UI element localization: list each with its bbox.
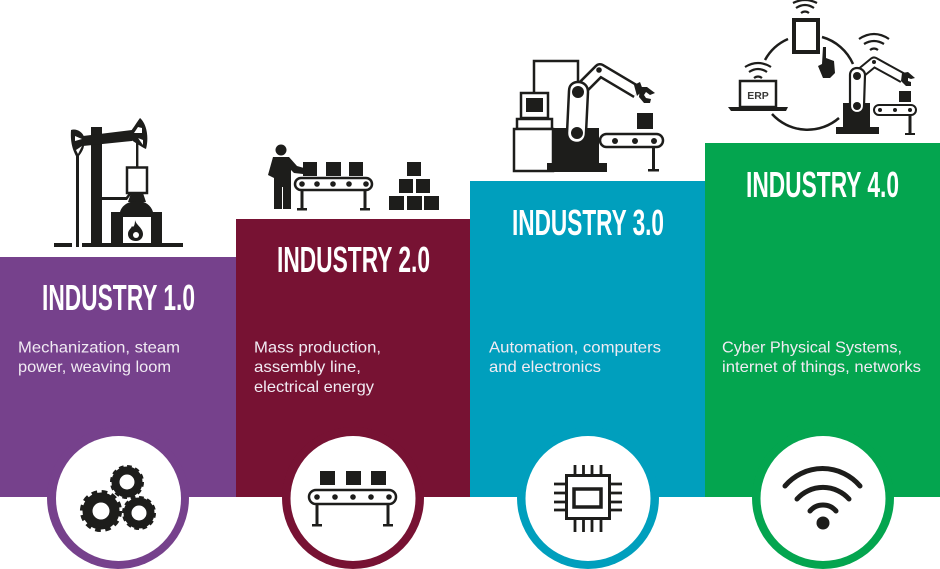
circle badge: gears — [47, 427, 189, 569]
circle badge: wifi — [752, 427, 894, 569]
text: Industry 2.0 description: assembly line, — [254, 359, 361, 376]
icon: worker at assembly line — [268, 144, 439, 210]
icon: gears — [82, 467, 154, 530]
heading: Industry 2.0: INDUSTRY 2.0 — [277, 239, 430, 280]
icon: microchip — [554, 465, 622, 532]
icon: connected factory network — [728, 0, 916, 135]
text: Industry 2.0 description: Mass production, — [254, 340, 381, 356]
text: Industry 4.0 description: internet of things, networks — [722, 359, 921, 376]
circle badge: conveyor — [282, 427, 424, 569]
text: Industry 4.0 description: Cyber Physical Systems, — [722, 340, 902, 356]
panel: Industry 4.0 — [705, 0, 940, 569]
heading: Industry 3.0: INDUSTRY 3.0 — [512, 202, 664, 243]
icon: connected factory network: ERP — [747, 90, 769, 102]
icon: steam engine — [54, 118, 183, 247]
text: Industry 3.0 description — [489, 340, 661, 376]
text: Industry 2.0 description — [254, 340, 381, 396]
icon: conveyor belt — [309, 471, 396, 526]
text: Industry 4.0 description — [722, 340, 921, 376]
panel: Industry 2.0 — [236, 144, 470, 569]
text: Industry 3.0 description: and electronics — [489, 359, 601, 376]
heading: Industry 1.0: INDUSTRY 1.0 — [42, 277, 195, 318]
circle badge: chip — [517, 427, 659, 569]
text: Industry 2.0 description: electrical energy — [254, 379, 374, 396]
icon: wifi signal — [785, 469, 860, 530]
text: Industry 1.0 description — [18, 340, 180, 376]
text: Industry 3.0 description: Automation, computers — [489, 340, 661, 356]
text: Industry 1.0 description: power, weaving loom — [18, 359, 171, 376]
text: Industry 1.0 description: Mechanization, steam — [18, 340, 180, 356]
icon: robot arm workstation — [514, 61, 663, 172]
panel: Industry 1.0 — [0, 118, 236, 569]
panel: Industry 3.0 — [470, 61, 705, 569]
